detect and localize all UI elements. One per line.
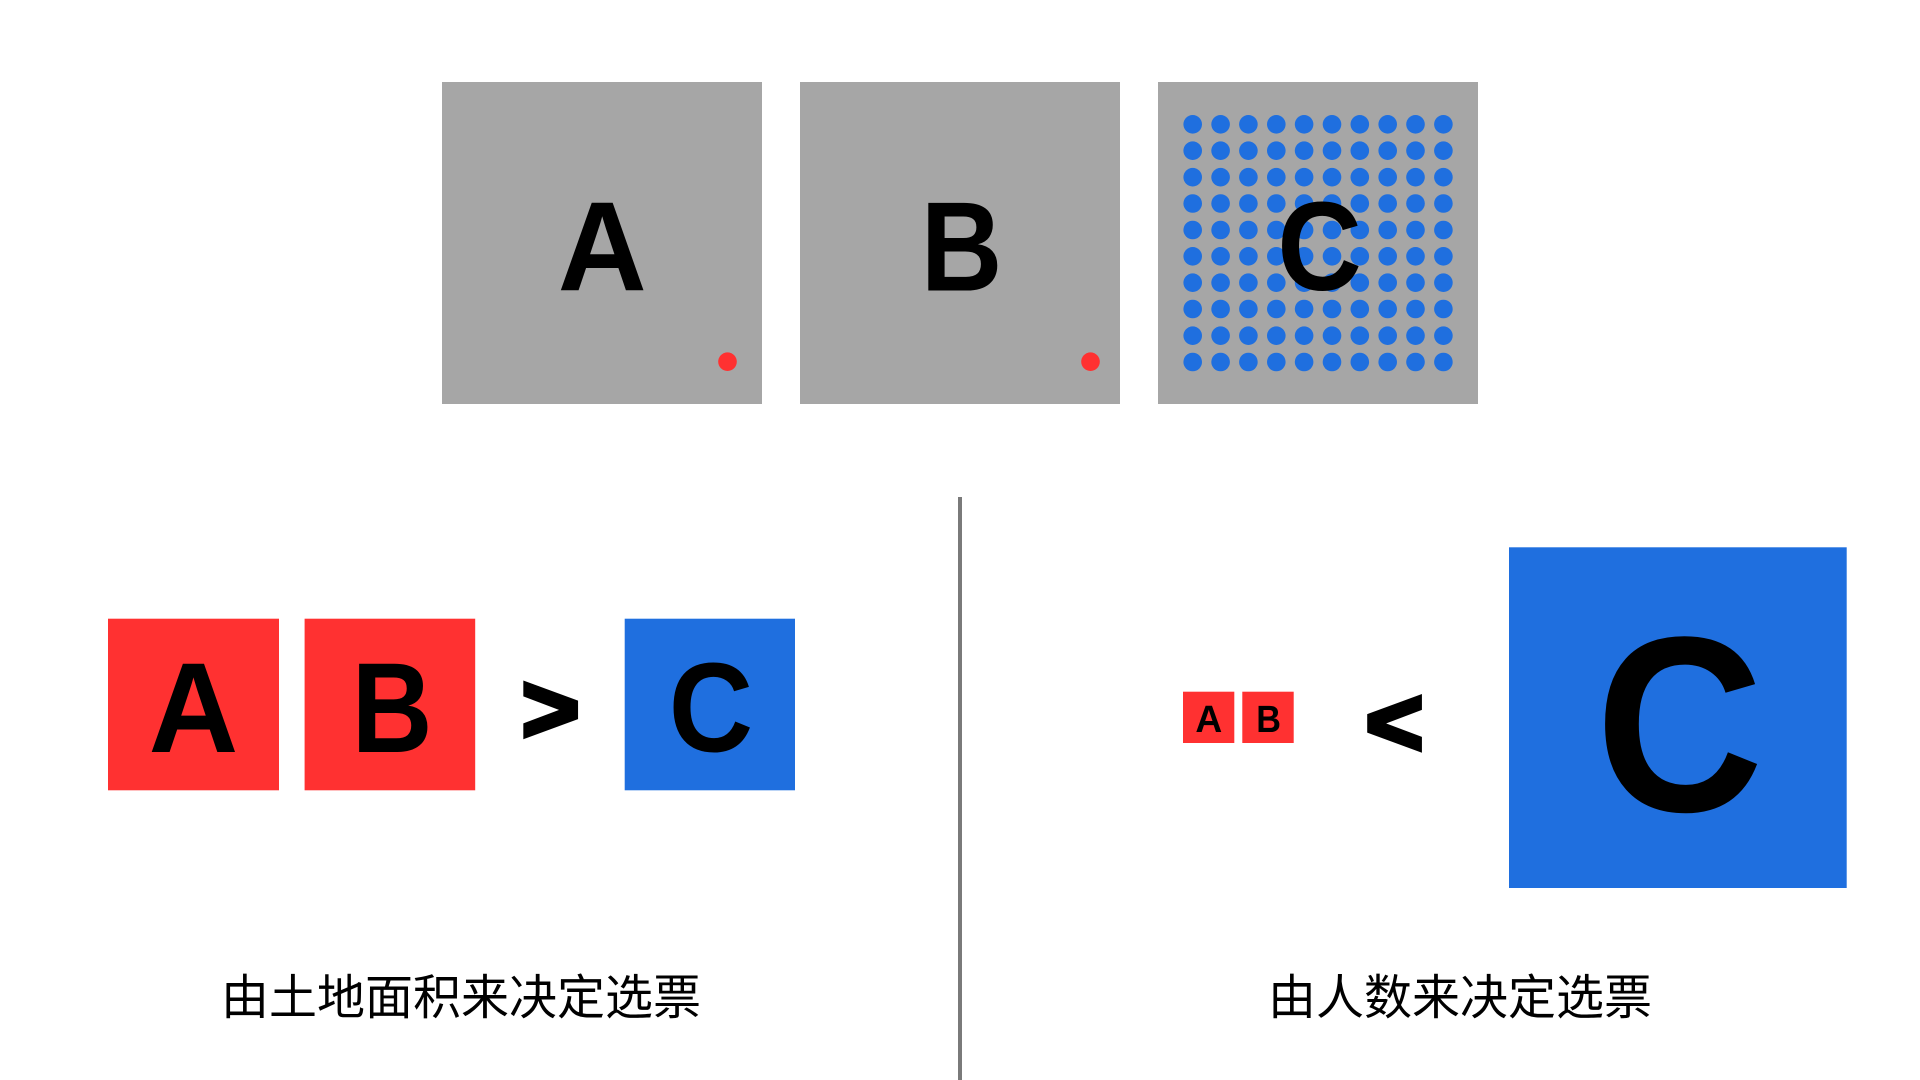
red block A [108, 619, 279, 790]
caption: population: 由人数来决定选票 [1268, 972, 1652, 1025]
panel: land-area comparison [108, 619, 795, 1025]
greater-than sign: > [522, 655, 579, 762]
red voter dot A [718, 352, 737, 371]
large blue block C [1509, 547, 1847, 888]
less-than sign: < [1366, 668, 1423, 776]
divider [958, 497, 962, 1080]
small red block A [1183, 692, 1234, 743]
letter C: C [1277, 176, 1362, 317]
blue block C: C [669, 637, 753, 779]
small red block B [1242, 692, 1294, 743]
panel: region A [442, 82, 762, 404]
panel: region B [800, 82, 1120, 404]
red block B: B [352, 637, 432, 780]
letter A: A [558, 176, 647, 318]
red block A: A [149, 636, 238, 779]
letter B: B [921, 177, 1002, 318]
large blue block C: C [1596, 585, 1763, 865]
caption: land area: 由土地面积来决定选票 [221, 972, 701, 1025]
small red block B: B [1256, 697, 1281, 740]
blue block C [625, 619, 795, 790]
panel: region C [1158, 82, 1478, 404]
red voter dot B [1081, 352, 1100, 371]
panel: population comparison [1183, 547, 1847, 1025]
small red block A: A [1195, 698, 1222, 740]
blue voter dots grid [1183, 115, 1453, 371]
red block B [305, 619, 475, 790]
